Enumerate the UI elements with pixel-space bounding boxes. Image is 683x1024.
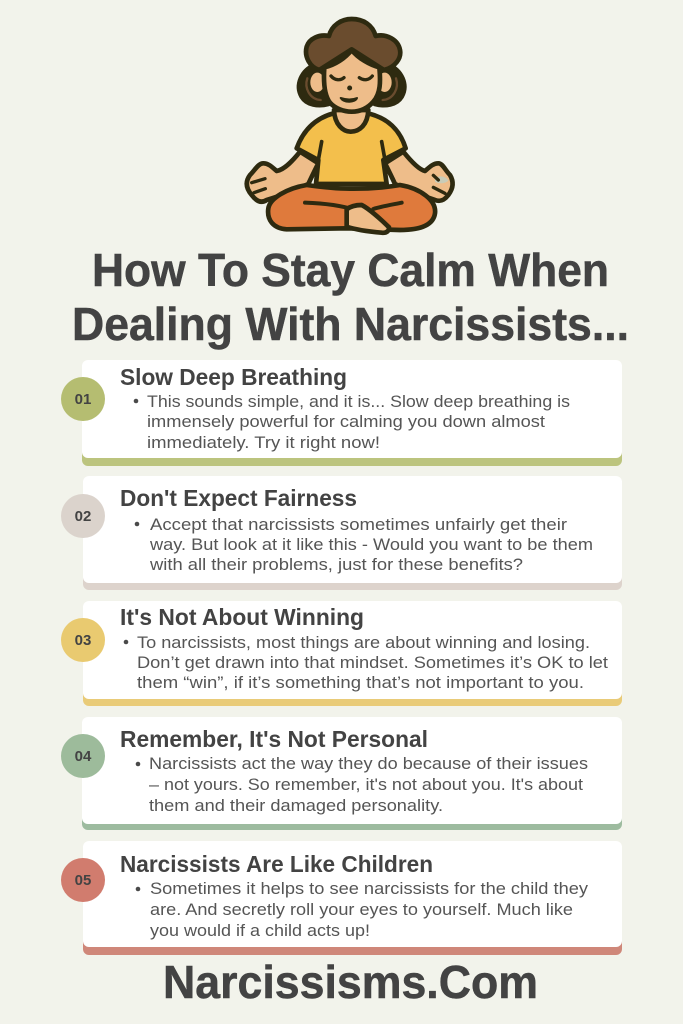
panel: step 05 narcissists are like children [61,841,622,955]
number badge 04: 04 [75,748,92,765]
number badge 02: 02 [75,508,91,525]
heading 05: Narcissists Are Like Children [120,851,433,877]
body text 04 [136,754,588,815]
body text 02: Accept that narcissists sometimes unfairly get their [150,515,567,534]
body text 02 [135,515,593,574]
body text 03: them “win”, if it’s something that’s not important to you. [137,673,584,692]
panel: step 04 remember, it's not personal [61,717,622,830]
title: How To Stay Calm When [92,244,609,296]
number badge 01: 01 [75,391,91,408]
panel: step 01 slow deep breathing [61,360,622,466]
number badge 02 [61,494,105,538]
panel: step 02 don't expect fairness [61,476,622,590]
body text 05: Sometimes it helps to see narcissists for the child they [150,879,589,898]
body text 02: way. But look at it like this - Would you want to be them [149,535,593,554]
body text 05 [136,879,589,940]
number badge 01 [61,377,105,421]
title [72,244,629,350]
number badge 03: 03 [75,632,91,649]
body text 05: you would if a child acts up! [150,921,370,940]
body text 05: are. And secretly roll your eyes to yourself. Much like [150,900,573,919]
body text 04: them and their damaged personality. [149,796,443,815]
body text 03 [124,633,608,692]
footer website name: Narcissisms.Com [163,956,538,1008]
body text 04: Narcissists act the way they do because of their issues [149,754,588,773]
heading 02: Don't Expect Fairness [120,485,357,511]
number badge 05 [61,858,105,902]
body text 01 [134,392,570,452]
body text 02: with all their problems, just for these benefits? [149,555,523,574]
body text 01: immensely powerful for calming you down almost [147,412,545,431]
body text 03: Don’t get drawn into that mindset. Sometimes it’s OK to let [137,653,608,672]
body text 01: immediately. Try it right now! [147,433,380,452]
heading 03: It's Not About Winning [120,604,364,630]
body text 03: To narcissists, most things are about winning and losing. [137,633,590,652]
body text 01: This sounds simple, and it is... Slow deep breathing is [147,392,570,411]
number badge 03 [61,618,105,662]
panel: step 03 it's not about winning [61,601,622,706]
heading 04: Remember, It's Not Personal [120,726,428,752]
icon: meditating person [247,19,453,233]
number badge 05: 05 [75,872,91,889]
number badge 04 [61,734,105,778]
title: Dealing With Narcissists... [72,298,629,350]
heading 01: Slow Deep Breathing [120,364,347,390]
body text 04: – not yours. So remember, it's not about you. It's about [149,775,583,794]
